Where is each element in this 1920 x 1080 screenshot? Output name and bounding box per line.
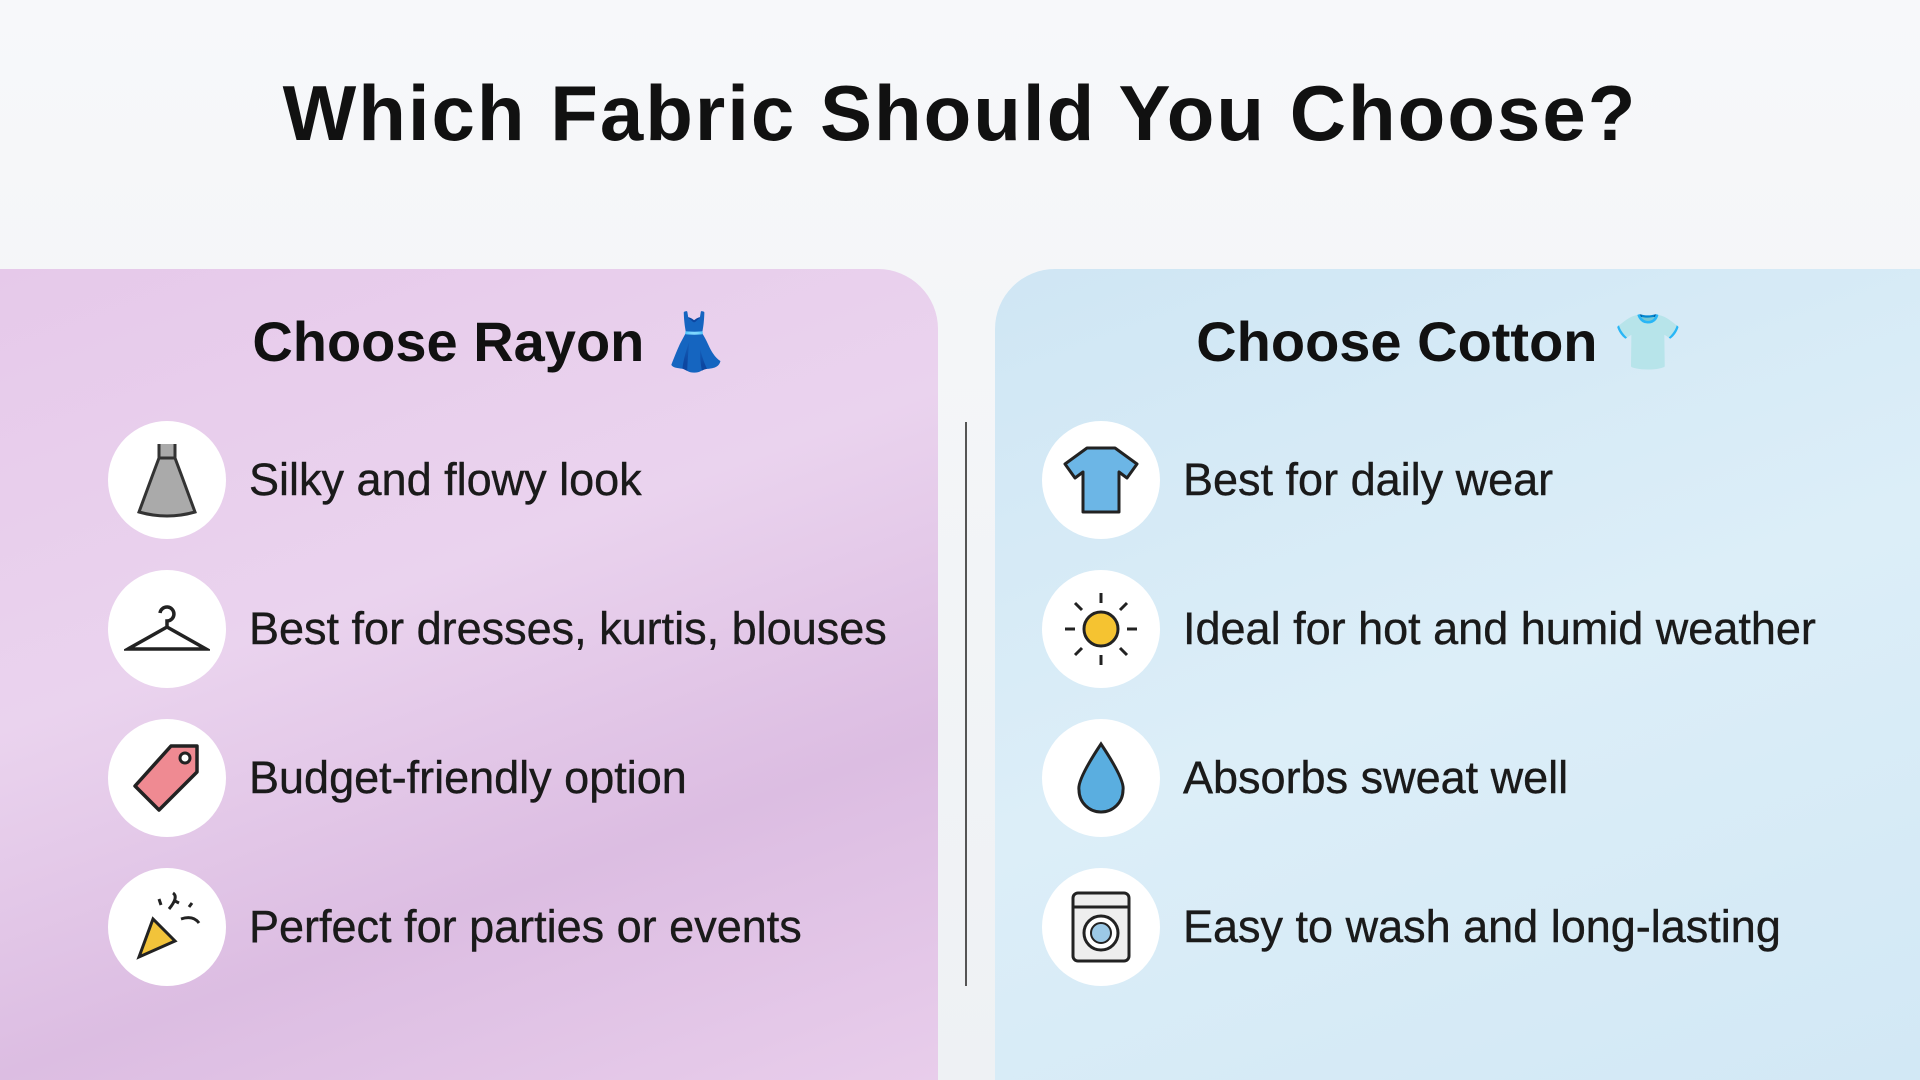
row: budget: [108, 719, 687, 837]
panel: cotton: [995, 269, 1920, 1080]
row: silky: Silky and flowy look: [249, 454, 642, 505]
row: wash: Easy to wash and long-lasting: [1183, 901, 1781, 952]
heading: rayon: Choose Rayon 👗: [252, 310, 730, 373]
row: wash: [1042, 868, 1781, 986]
row: silky: [108, 421, 642, 539]
row: weather: Ideal for hot and humid weather: [1183, 603, 1816, 654]
row: daily: [1042, 421, 1553, 539]
row: sweat: Absorbs sweat well: [1183, 752, 1568, 803]
title: Which Fabric Should You Choose?: [283, 69, 1637, 157]
row: parties: [108, 868, 802, 986]
row: dresses: [108, 570, 887, 688]
panel: rayon: [0, 269, 938, 1080]
row: daily: Best for daily wear: [1183, 454, 1553, 505]
heading: cotton: Choose Cotton 👕: [1196, 310, 1683, 373]
row: parties: Perfect for parties or events: [249, 901, 802, 952]
row: budget: Budget-friendly option: [249, 752, 687, 803]
row: sweat: [1042, 719, 1568, 837]
row: weather: [1042, 570, 1816, 688]
row: dresses: Best for dresses, kurtis, blouses: [249, 603, 887, 654]
